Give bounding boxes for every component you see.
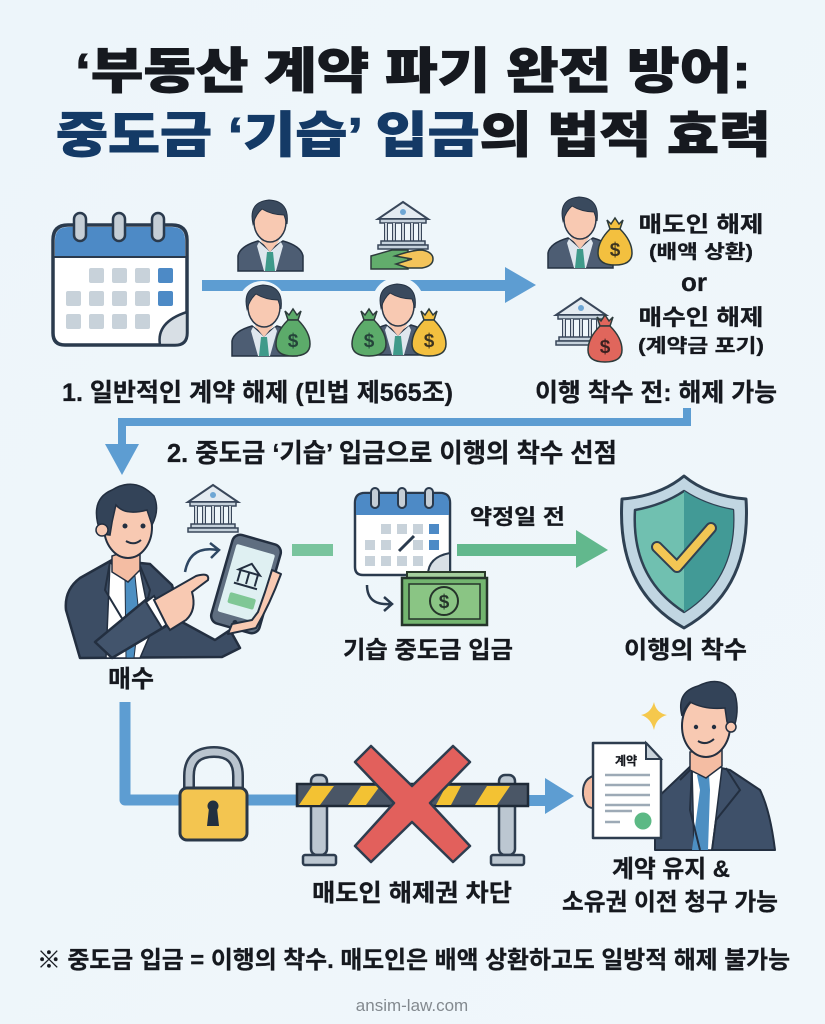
text: before performance: 이행 착수 전: 해제 가능 bbox=[535, 379, 777, 407]
arrow: connector to step 2 bbox=[105, 408, 687, 475]
icon: curved arrow to phone bbox=[185, 543, 219, 572]
title: 중도금 ‘기습’ 입금 의 법적 효력 bbox=[56, 109, 771, 163]
icon: person with green money bag: $ bbox=[288, 331, 299, 352]
icon: red X bbox=[355, 746, 470, 862]
illustration: man with contract bbox=[655, 682, 775, 850]
icon: calendar bbox=[53, 213, 187, 345]
icon: bank with hand bbox=[371, 202, 433, 269]
text: surprise payment: 기습 중도금 입금 bbox=[343, 637, 513, 664]
icon: bank with red bag bbox=[556, 298, 622, 362]
text: or: or bbox=[681, 267, 707, 297]
text: contract maintained: 계약 유지 & bbox=[612, 856, 730, 883]
icon: sparkle bbox=[641, 702, 667, 730]
text: seller rescission: (배액 상환) bbox=[649, 241, 753, 263]
icon: barrier bbox=[297, 775, 528, 865]
icon: person with two money bags bbox=[352, 277, 446, 356]
text: seller rescission: 매도인 해제 bbox=[638, 212, 764, 237]
text: before due date: 약정일 전 bbox=[470, 506, 565, 529]
icon: contract document: 계약 bbox=[615, 754, 637, 768]
icon: seller person bbox=[238, 200, 303, 271]
arrow: contract flow bbox=[202, 267, 536, 303]
icon: padlock bbox=[180, 752, 247, 840]
icon: contract document bbox=[583, 743, 661, 838]
icon: cash bbox=[402, 572, 487, 625]
icon: person with green money bag bbox=[232, 281, 310, 356]
title bbox=[56, 45, 771, 163]
icon: cash: $ bbox=[439, 592, 450, 613]
icon: calendar with check bbox=[355, 488, 450, 575]
icon: person with two money bags: $ bbox=[364, 331, 375, 352]
text: seller rescission bbox=[638, 212, 764, 263]
icon: person with two money bags: $ bbox=[424, 331, 435, 352]
heading: step 1: 1. 일반적인 계약 해제 (민법 제565조) bbox=[62, 379, 453, 407]
text: buyer rescission: 매수인 해제 bbox=[638, 305, 764, 330]
footnote: ※ 중도금 입금 = 이행의 착수. 매도인은 배액 상환하고도 일방적 해제 불가능 bbox=[37, 947, 790, 974]
text: seller's right blocked: 매도인 해제권 차단 bbox=[312, 880, 512, 907]
text: contract maintained bbox=[562, 856, 778, 916]
text: contract maintained: 소유권 이전 청구 가능 bbox=[562, 889, 778, 916]
title: ‘부동산 계약 파기 완전 방어: bbox=[75, 45, 751, 99]
icon: seller with gold bag bbox=[548, 197, 632, 268]
icon: seller with gold bag: $ bbox=[610, 240, 621, 261]
icon: curved arrow to cash bbox=[367, 585, 392, 611]
icon: small bank bbox=[188, 485, 238, 532]
arrow: blocked path bbox=[125, 702, 574, 814]
arrow: green arrow bbox=[457, 530, 608, 568]
heading: step 2: 2. 중도금 ‘기습’ 입금으로 이행의 착수 선점 bbox=[167, 438, 617, 468]
text: buyer: 매수 bbox=[108, 666, 154, 693]
source url: ansim-law.com bbox=[356, 996, 468, 1015]
arrow: green segment left bbox=[292, 544, 333, 556]
illustration: buyer with phone bbox=[66, 484, 283, 658]
icon: shield bbox=[622, 476, 746, 628]
text: buyer rescission: (계약금 포기) bbox=[638, 335, 764, 357]
icon: bank with red bag: $ bbox=[600, 337, 611, 358]
text: buyer rescission bbox=[638, 305, 764, 357]
text: commencement of performance: 이행의 착수 bbox=[624, 637, 747, 664]
